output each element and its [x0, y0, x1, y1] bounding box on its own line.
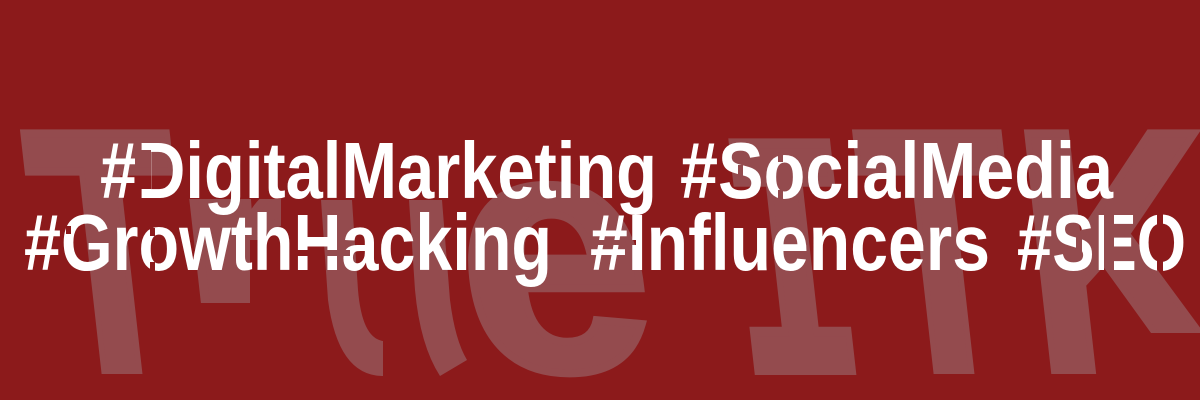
- hashtags: #DigitalMarketing: [100, 126, 657, 215]
- hashtags: #GrowthHacking: [24, 198, 552, 287]
- hashtags: #Influencers: [590, 198, 990, 287]
- banner: [20, 129, 1200, 378]
- hashtags: #SocialMedia: [680, 126, 1113, 215]
- hashtags: [24, 126, 1186, 287]
- watermark: The ITK: [20, 129, 1200, 378]
